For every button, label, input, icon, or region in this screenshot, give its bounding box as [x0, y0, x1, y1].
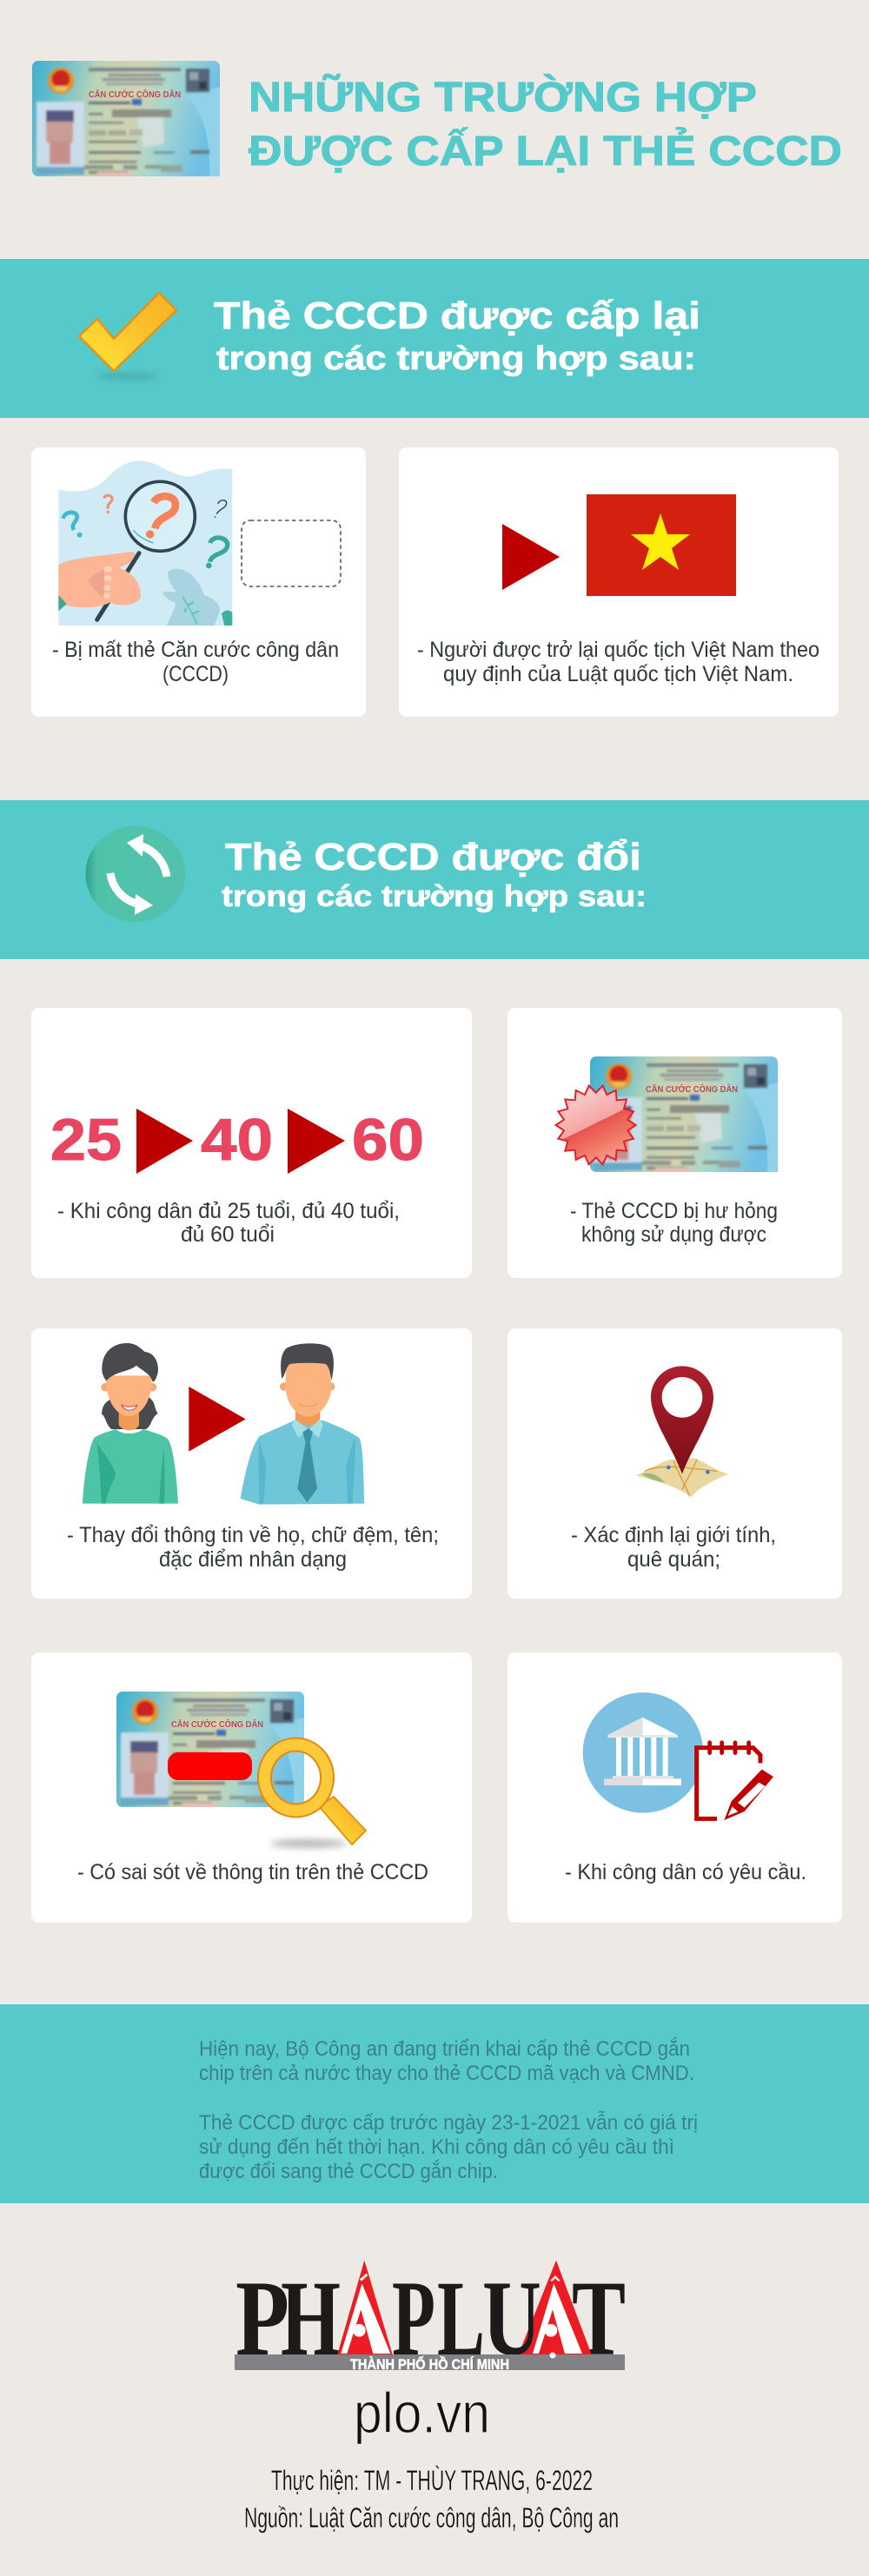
heading: exchanged: trong các trường hợp sau: — [222, 880, 647, 913]
header: id card image: CĂN CƯỚC CÔNG DÂN — [89, 89, 181, 100]
heading: re-issued: Thẻ CCCD được cấp lại — [214, 295, 700, 337]
heading: exchanged — [222, 836, 647, 913]
note band — [0, 2004, 869, 2203]
arrow — [502, 524, 560, 590]
logo: Pháp Luật — [235, 2259, 626, 2378]
caption: - Khi công dân đủ 25 tuổi, đủ 40 tuổi, — [57, 1199, 400, 1223]
title: NHỮNG TRƯỜNG HỢP — [249, 73, 757, 121]
panel: change of personal information — [31, 1328, 472, 1599]
caption: không sử dụng được — [581, 1222, 766, 1247]
note text: được đổi sang thẻ CCCD gắn chip. — [199, 2160, 498, 2183]
caption: - Có sai sót về thông tin trên thẻ CCCD — [77, 1860, 428, 1884]
icon: map pin — [636, 1366, 728, 1497]
caption: (CCCD) — [163, 662, 229, 686]
note text: Hiện nay, Bộ Công an đang triển khai cấp thẻ CCCD gắn — [199, 2037, 690, 2061]
icon: id card under magnifier: CĂN CƯỚC CÔNG DÂN — [171, 1718, 263, 1730]
icon: government building and notepad — [583, 1692, 773, 1820]
logo: Pháp Luật: P — [392, 2259, 435, 2378]
panel: lost card — [31, 447, 366, 717]
panel: damaged card — [507, 1008, 842, 1278]
logo: Pháp Luật: H — [281, 2259, 341, 2378]
icon: woman to man — [83, 1343, 364, 1505]
header: id card image — [32, 61, 220, 176]
caption — [57, 1199, 400, 1247]
caption: quê quán; — [627, 1547, 720, 1572]
caption: đặc điểm nhân dạng — [159, 1547, 347, 1572]
icon: id card under magnifier — [116, 1692, 366, 1848]
logo: Pháp Luật: THÀNH PHỐ HỒ CHÍ MINH — [350, 2355, 509, 2373]
note text: sử dụng đến hết thời hạn. Khi công dân có yêu cầu thì — [199, 2136, 674, 2159]
panel: ages — [31, 1008, 472, 1278]
icon: refresh circle — [85, 825, 186, 923]
age sequence: 60 — [352, 1107, 424, 1173]
caption: quy định của Luật quốc tịch Việt Nam. — [443, 662, 793, 686]
icon: id card with burst: CĂN CƯỚC CÔNG DÂN — [646, 1083, 738, 1095]
caption: - Người được trở lại quốc tịch Việt Nam theo — [417, 638, 819, 662]
logo: Pháp Luật: L — [437, 2259, 485, 2378]
age sequence: 40 — [201, 1107, 273, 1173]
age sequence: 25 — [50, 1107, 122, 1173]
note text: Thẻ CCCD được cấp trước ngày 23-1-2021 vẫn có giá trị — [199, 2111, 698, 2135]
panel: regained nationality — [399, 447, 839, 717]
heading: re-issued — [214, 295, 700, 377]
title: ĐƯỢC CẤP LẠI THẺ CCCD — [249, 127, 842, 175]
logo: Pháp Luật: T — [572, 2259, 626, 2378]
credits — [244, 2465, 619, 2533]
caption — [52, 638, 339, 686]
dashed card outline — [242, 520, 341, 586]
caption — [570, 1199, 778, 1247]
panel: errors on card — [31, 1652, 472, 1923]
caption: - Thay đổi thông tin về họ, chữ đệm, tên; — [67, 1523, 439, 1547]
caption — [417, 638, 819, 686]
caption — [67, 1523, 439, 1572]
title — [249, 73, 842, 175]
heading: re-issued: trong các trường hợp sau: — [216, 341, 696, 377]
caption: - Xác định lại giới tính, — [571, 1523, 776, 1547]
heading: exchanged: Thẻ CCCD được đổi — [225, 836, 641, 878]
illustration: magnifier over question marks — [58, 460, 232, 626]
icon: Vietnam flag — [587, 494, 736, 596]
panel: gender and hometown — [507, 1328, 842, 1599]
credits: Thực hiện: TM - THÙY TRANG, 6-2022 — [271, 2465, 593, 2496]
caption: - Thẻ CCCD bị hư hỏng — [570, 1199, 778, 1223]
age sequence — [50, 1107, 424, 1174]
section band: re-issued — [0, 259, 869, 418]
note text — [199, 2037, 698, 2183]
caption — [571, 1523, 776, 1572]
note text: chip trên cả nước thay cho thẻ CCCD mã vạch và CMND. — [199, 2062, 694, 2085]
logo: Pháp Luật: P — [235, 2259, 289, 2378]
section band: exchanged — [0, 800, 869, 959]
caption: - Khi công dân có yêu cầu. — [565, 1860, 806, 1884]
caption: - Bị mất thẻ Căn cước công dân — [52, 638, 339, 662]
site address: plo.vn — [354, 2381, 490, 2445]
logo: Pháp Luật: U — [482, 2259, 541, 2378]
credits: Nguồn: Luật Căn cước công dân, Bộ Công an — [244, 2502, 619, 2533]
caption: đủ 60 tuổi — [181, 1222, 275, 1247]
icon: gold check mark — [79, 293, 176, 380]
icon: id card with burst — [556, 1056, 778, 1172]
panel: citizen request — [507, 1652, 842, 1923]
